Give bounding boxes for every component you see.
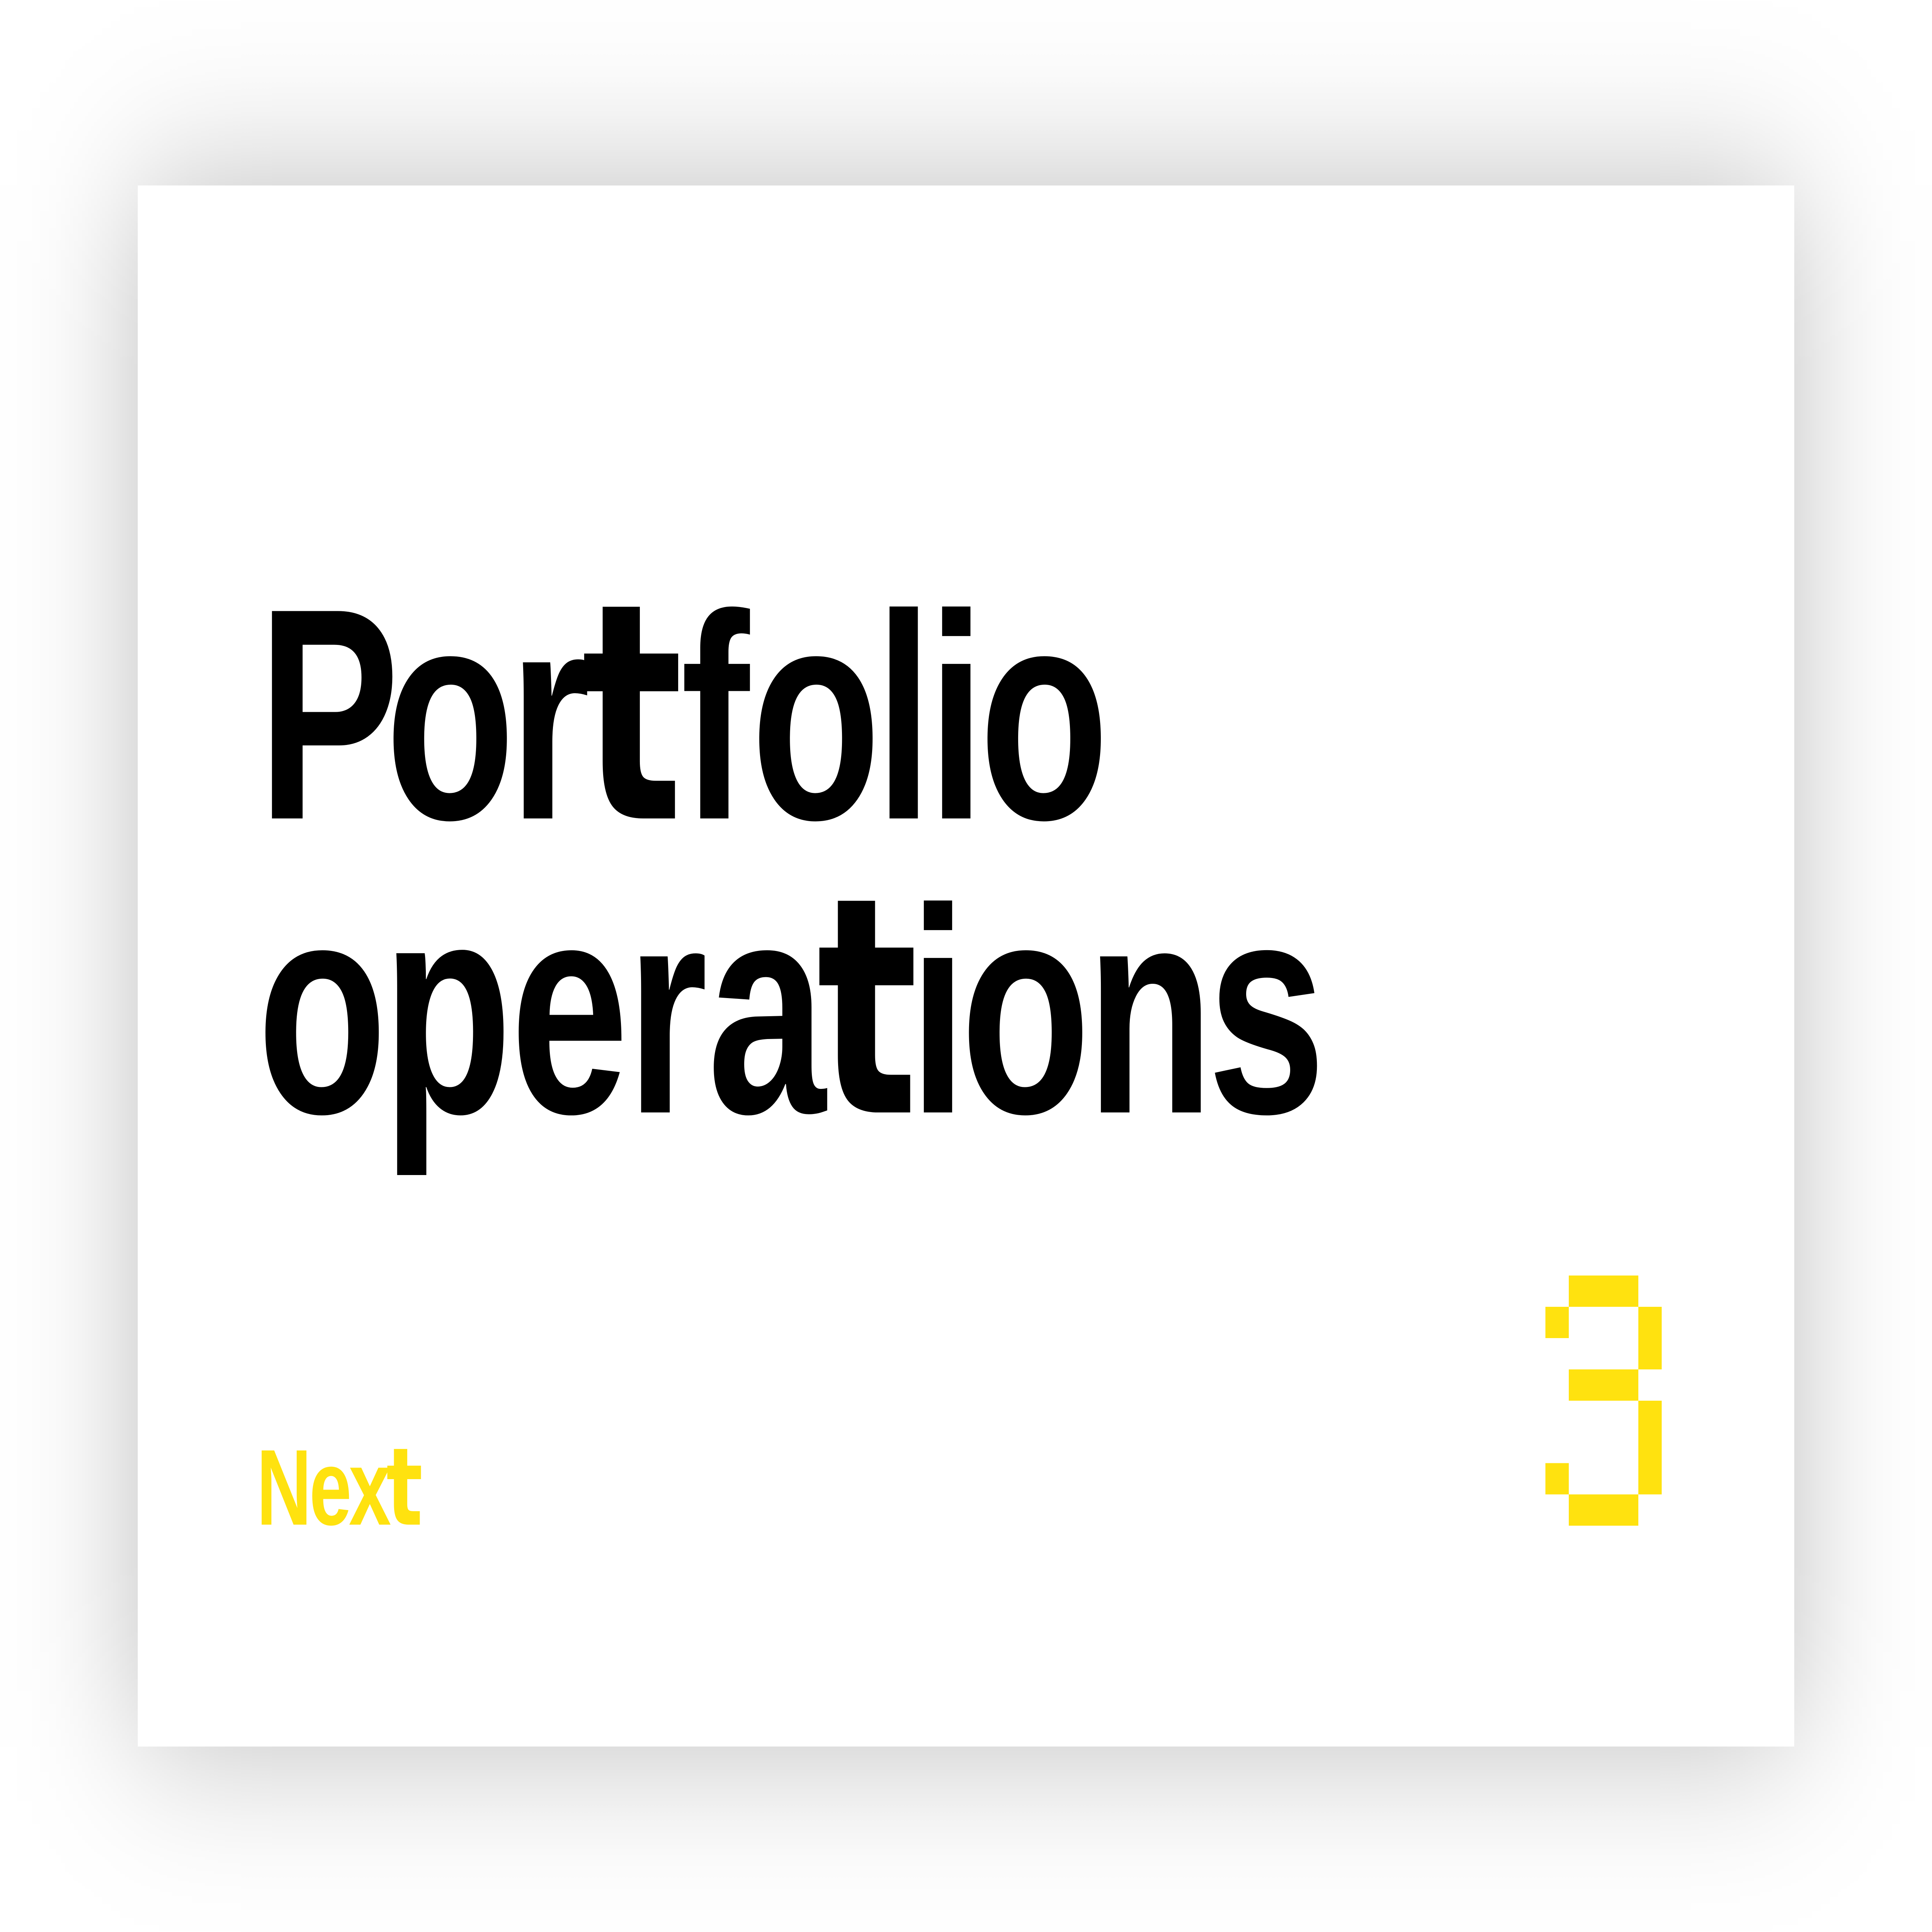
title line 2: operations: o — [961, 840, 1090, 1177]
next label: e — [309, 1427, 352, 1548]
title line 1: Portfolio: o — [979, 546, 1109, 883]
title line 1: Portfolio: o — [385, 546, 515, 883]
title line 1: Portfolio: f — [681, 554, 752, 881]
title — [257, 539, 1326, 1184]
title line 1: Portfolio: t — [582, 539, 683, 890]
title line 2: operations: i — [910, 848, 967, 1175]
title line 1: Portfolio: l — [875, 554, 932, 881]
title line 2: operations: t — [816, 833, 918, 1184]
title line 1: Portfolio: P — [258, 546, 400, 883]
title line 2: operations: s — [1208, 840, 1326, 1177]
title line 1: Portfolio: r — [509, 551, 590, 881]
next label: x — [349, 1427, 391, 1548]
title line 1: Portfolio: o — [751, 546, 881, 883]
panel: white card — [138, 185, 1794, 1747]
title line 2: operations: a — [707, 840, 827, 1177]
page number: pixel digit 3 — [1546, 1276, 1662, 1526]
title line 2: operations: n — [1086, 845, 1214, 1175]
title line 2: operations: r — [627, 845, 708, 1175]
next label: t — [386, 1425, 423, 1550]
title line 2: operations: o — [257, 840, 387, 1177]
title line 1: Portfolio: i — [928, 554, 985, 881]
next label: N — [257, 1427, 311, 1548]
title line 2: operations: e — [510, 840, 629, 1177]
title line 2: operations: p — [382, 840, 512, 1179]
